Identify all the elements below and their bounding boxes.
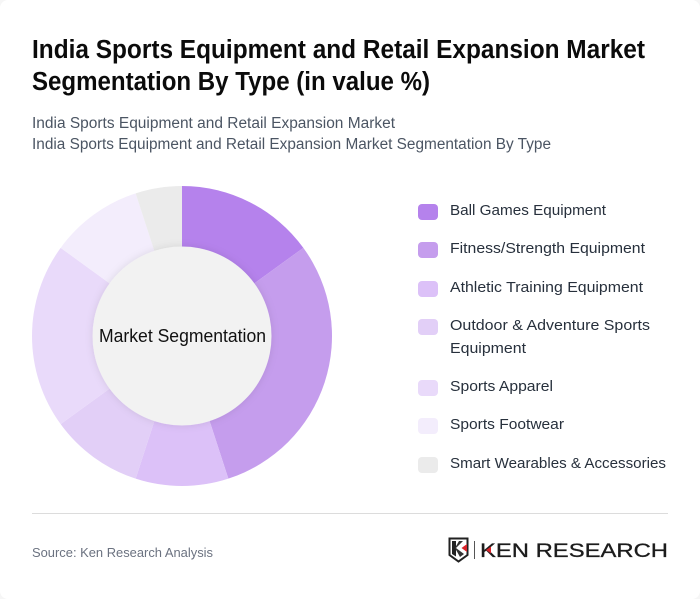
- title: India Sports Equipment and Retail Expansion Market: [32, 36, 645, 64]
- legend item: Outdoor & Adventure Sports Equipment: [418, 317, 650, 357]
- legend item: Ball Games Equipment: Ball Games Equipment: [450, 202, 607, 219]
- segment: Athletic Training Equipment: [136, 336, 228, 486]
- subtitle: India Sports Equipment and Retail Expansion Market: [32, 115, 396, 132]
- legend item: Outdoor & Adventure Sports Equipment: Equipment: [450, 340, 527, 357]
- subtitle: India Sports Equipment and Retail Expansion Market Segmentation By Type: [32, 136, 551, 153]
- legend: [418, 202, 666, 473]
- centre label: Market Segmentation: [99, 326, 266, 346]
- segment: Outdoor & Adventure Sports Equipment: [61, 336, 182, 479]
- icon: shield: [450, 538, 468, 562]
- legend item: Smart Wearables & Accessories: Smart Wearables & Accessories: [450, 455, 666, 472]
- segment: Ball Games Equipment: [182, 186, 303, 336]
- legend item: Sports Footwear: Sports Footwear: [450, 416, 564, 433]
- donut centre: [92, 246, 272, 426]
- legend item: Fitness/Strength Equipment: Fitness/Strength Equipment: [450, 240, 646, 257]
- donut chart: [32, 186, 332, 486]
- logo: Ken Research: [450, 538, 668, 562]
- subtitle: [32, 115, 551, 153]
- wordmark: KEN RESEARCH: [480, 540, 668, 562]
- legend item: Athletic Training Equipment: Athletic Training Equipment: [450, 279, 644, 296]
- segment: Smart Wearables & Accessories: [136, 186, 182, 336]
- source note: Source: Ken Research Analysis: [32, 545, 213, 560]
- legend item: Sports Apparel: [418, 378, 553, 396]
- title: [32, 36, 645, 96]
- legend item: Sports Apparel: Sports Apparel: [450, 378, 553, 395]
- legend item: Outdoor & Adventure Sports Equipment: Outdoor & Adventure Sports: [450, 317, 650, 334]
- segment: Sports Apparel: [32, 248, 182, 424]
- segment: Sports Footwear: [61, 193, 182, 336]
- segment: Fitness/Strength Equipment: [182, 248, 332, 479]
- title: Segmentation By Type (in value %): [32, 68, 430, 96]
- icon: wordmark red accent: [486, 546, 491, 554]
